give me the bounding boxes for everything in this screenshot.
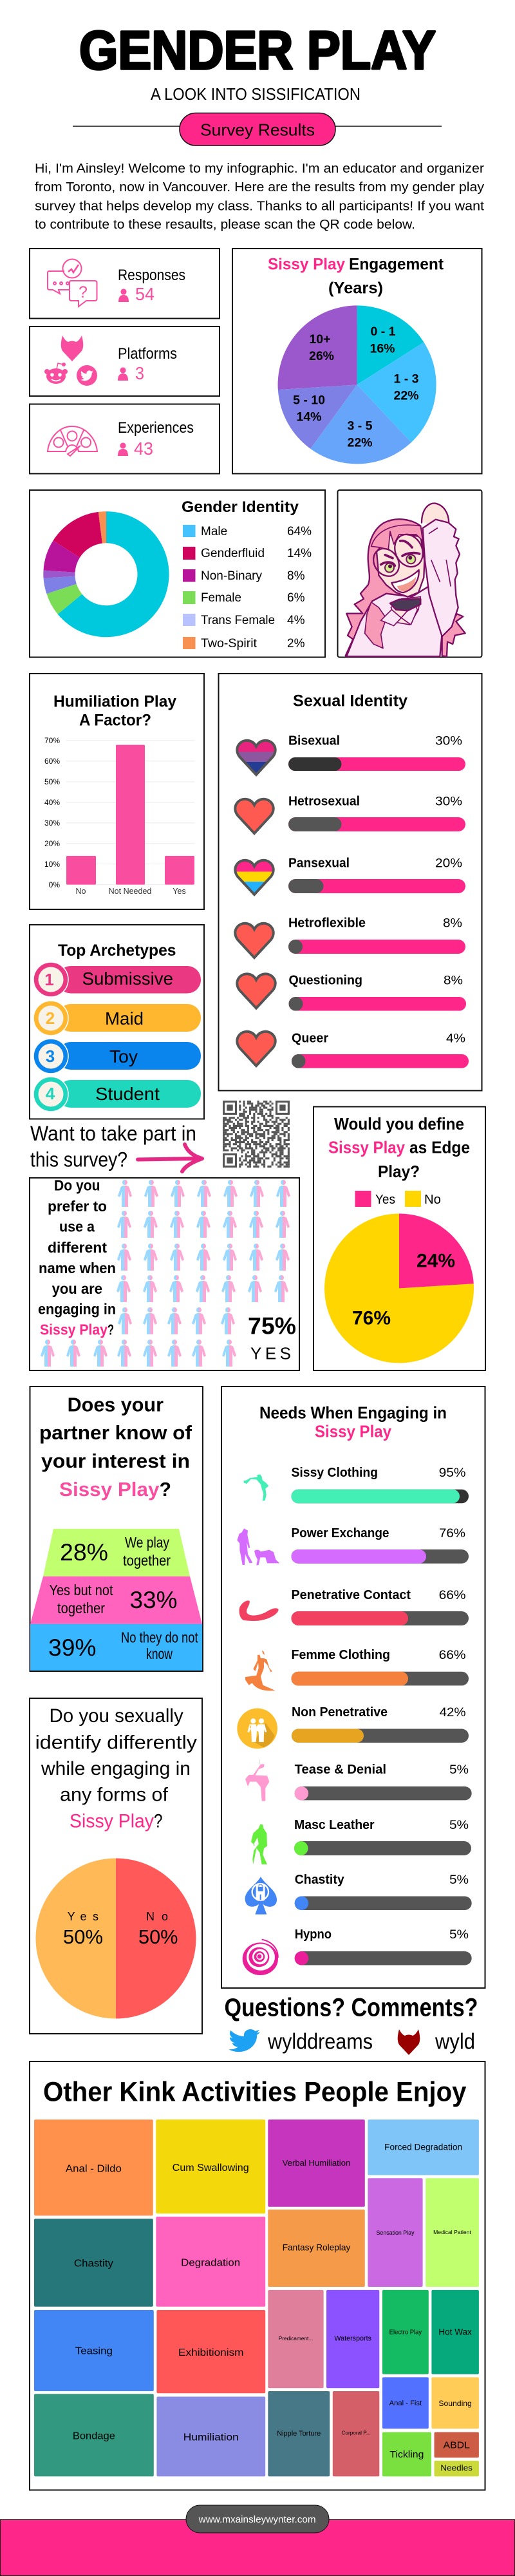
heading: partner know of <box>39 1421 192 1444</box>
legend: Non-Binary <box>201 569 262 583</box>
pictogram: people icons <box>41 1180 290 1367</box>
archetype 2: maid <box>33 1001 201 1036</box>
footer band <box>0 2519 515 2576</box>
treemap: Needles <box>440 2463 473 2472</box>
question text: use a <box>59 1218 95 1235</box>
funnel tier: yes but not together <box>30 1577 202 1624</box>
funnel tier: we play together: 28% <box>60 1539 108 1566</box>
row: power exchange: Power Exchange <box>291 1526 389 1540</box>
funnel tier: we play together: We play <box>125 1534 169 1551</box>
legend: 4% <box>287 614 305 627</box>
heading: Sissy Play <box>70 1811 154 1832</box>
heading <box>328 1114 470 1181</box>
pie chart <box>36 1859 196 2018</box>
pie chart: 16% <box>370 341 395 355</box>
heading <box>259 1403 447 1441</box>
row: pansexual: Pansexual <box>288 857 350 871</box>
panel: gender identity <box>30 490 325 657</box>
row: hetrosexual: 30% <box>435 795 462 809</box>
legend: 14% <box>287 547 312 560</box>
heading: identify differently <box>35 1732 197 1753</box>
treemap: Anal - Fist <box>389 2400 422 2407</box>
row: bisexual: Bisexual <box>288 734 340 748</box>
label: experiences: Experiences <box>118 419 194 437</box>
heading: Sissy Play <box>328 1138 405 1157</box>
heading: ? <box>154 1811 162 1832</box>
pie chart: Yes <box>68 1910 98 1923</box>
heading: A Factor? <box>79 711 151 729</box>
legend: Trans Female <box>201 614 275 627</box>
row: pansexual: 20% <box>435 857 462 871</box>
row: hypno: 5% <box>449 1928 469 1942</box>
title: GENDER PLAY <box>79 20 436 80</box>
heading: Would you define <box>334 1114 464 1133</box>
row: hetroflexible <box>235 916 465 958</box>
call to action text: Want to take part in <box>30 1122 196 1145</box>
treemap: Humiliation <box>183 2432 239 2443</box>
row: penetrative contact: 66% <box>439 1589 466 1602</box>
treemap: Fantasy Roleplay <box>283 2242 350 2253</box>
legend: Male <box>201 525 227 538</box>
treemap: Sensation Play <box>376 2230 415 2236</box>
question text: engaging in <box>38 1301 116 1318</box>
row: queer: 4% <box>446 1032 465 1046</box>
archetype 1: submissive <box>33 962 201 997</box>
pie chart: 22% <box>393 389 419 403</box>
illustration: pink haired character <box>346 503 465 656</box>
bar chart: 50% <box>44 777 60 786</box>
value: 75% yes: 75% <box>248 1313 296 1340</box>
treemap: Watersports <box>334 2335 371 2343</box>
heading: Play? <box>378 1162 420 1181</box>
legend: Two-Spirit <box>201 637 258 650</box>
row: non penetrative <box>237 1705 469 1748</box>
heading <box>53 693 176 729</box>
treemap: Exhibitionism <box>178 2347 244 2358</box>
archetype 3: toy <box>33 1039 201 1074</box>
heading: any forms of <box>60 1784 169 1806</box>
pie chart: 24% <box>417 1251 455 1272</box>
panel: partner knowledge funnel <box>30 1387 203 1671</box>
legend: 2% <box>287 637 305 650</box>
pie chart <box>324 1213 474 1363</box>
pie chart: 22% <box>347 436 373 450</box>
archetype 4: student <box>33 1077 201 1112</box>
row: power exchange: 76% <box>439 1527 465 1540</box>
panel: edge play pie <box>314 1106 485 1370</box>
row: masc leather: Masc Leather <box>294 1818 375 1832</box>
treemap: Corporal P... <box>341 2429 371 2436</box>
intro text: from Toronto, now in Vancouver. Here are the results from my gender play <box>35 180 484 194</box>
treemap: Medical Patient <box>433 2229 471 2235</box>
pie chart: 50% <box>63 1926 103 1948</box>
funnel tier: yes but not together: together <box>57 1600 105 1616</box>
panel: identify differently pie <box>30 1698 202 2034</box>
heading: while engaging in <box>41 1758 191 1779</box>
QR code <box>223 1101 290 1168</box>
row: hetroflexible: 8% <box>443 917 462 931</box>
panel: top archetypes <box>30 925 204 1119</box>
question mark in bubble: ? <box>79 283 88 301</box>
value: 54: 54 <box>135 284 154 304</box>
funnel tier: we play together: together <box>123 1552 171 1569</box>
row: queer: Queer <box>292 1032 328 1046</box>
intro text: to contribute to these resaults, please scan the QR code below. <box>35 218 415 232</box>
pie chart: 3 - 5 <box>347 419 373 433</box>
row: bisexual: 30% <box>435 734 462 748</box>
heading: Gender Identity <box>182 498 299 516</box>
row: masc leather: 5% <box>449 1819 469 1832</box>
icon: twitter <box>77 365 97 386</box>
panel: responses <box>30 249 220 318</box>
pie chart: 76% <box>352 1308 391 1329</box>
bar chart: No <box>76 887 86 896</box>
treemap: Predicament... <box>279 2335 313 2342</box>
value: 75% yes: YES <box>250 1344 291 1363</box>
treemap: Tickling <box>389 2449 424 2460</box>
heading: Needs When Engaging in <box>259 1403 447 1423</box>
icon: mood gauge <box>48 426 97 456</box>
row: hetrosexual <box>235 795 465 833</box>
heading: Other Kink Activities People Enjoy <box>43 2077 467 2108</box>
row: hypno <box>243 1927 472 1975</box>
call to action text: this survey? <box>30 1148 127 1171</box>
panel: sexual identity <box>219 674 482 1091</box>
bar chart: Not Needed <box>109 887 151 896</box>
heading: as Edge <box>409 1138 470 1157</box>
arrow <box>138 1144 202 1171</box>
contact: twitter <box>229 2029 373 2054</box>
pie chart: 14% <box>296 410 322 424</box>
legend: Genderfluid <box>201 547 265 560</box>
question text: you are <box>52 1280 102 1297</box>
treemap: Anal - Dildo <box>66 2164 122 2175</box>
panel: experiences <box>30 404 220 474</box>
row: chastity <box>245 1873 472 1915</box>
question text: different <box>48 1239 107 1256</box>
row: tease and denial <box>245 1759 472 1801</box>
icon: chat bubbles <box>48 259 97 307</box>
pie chart: 0 - 1 <box>370 325 396 339</box>
legend: 8% <box>287 569 305 583</box>
heading: Sissy Play <box>268 255 345 273</box>
row: penetrative contact <box>239 1588 469 1625</box>
heading: your interest in <box>41 1450 190 1472</box>
treemap: Sounding <box>438 2399 472 2408</box>
question text <box>38 1177 116 1338</box>
panel: humiliation play bar chart <box>30 674 204 909</box>
row: queer <box>237 1032 469 1068</box>
icon: person <box>118 289 129 302</box>
intro text: survey that helps develop my class. Thanks to all participants! If you want <box>35 200 484 214</box>
archetype 4: student: Student <box>95 1084 160 1104</box>
row: femme clothing: 66% <box>439 1649 466 1662</box>
treemap: Nipple Torture <box>277 2430 321 2438</box>
archetype 1: submissive: Submissive <box>82 969 173 989</box>
heading <box>35 1705 197 1832</box>
bar chart: 20% <box>44 839 60 848</box>
row: questioning <box>237 974 466 1011</box>
subtitle: A LOOK INTO SISSIFICATION <box>151 84 360 104</box>
legend: Female <box>201 591 241 605</box>
legend: Yes <box>375 1193 395 1207</box>
row: hetroflexible: Hetroflexible <box>288 916 366 931</box>
pie chart: 1 - 3 <box>393 372 419 386</box>
survey results banner: Survey Results <box>200 120 315 139</box>
funnel tier: no they do not know: No they do not <box>121 1629 198 1646</box>
legend <box>355 1191 441 1207</box>
panel: preferred name pictogram <box>30 1177 299 1370</box>
question text: ? <box>108 1321 114 1338</box>
pie chart: 50% <box>138 1926 178 1948</box>
row: penetrative contact: Penetrative Contact <box>291 1588 411 1602</box>
heading: Do you sexually <box>49 1705 183 1727</box>
heading: Does your <box>68 1394 164 1416</box>
archetype 3: toy: 3 <box>46 1046 55 1066</box>
contact: wyld <box>398 2029 475 2055</box>
contact: twitter: wylddreams <box>267 2030 373 2054</box>
question text: Do you <box>54 1177 100 1194</box>
heading <box>268 255 444 298</box>
question text: Sissy Play <box>40 1321 108 1338</box>
archetype 3: toy: Toy <box>109 1046 138 1066</box>
bar chart: Yes <box>173 887 186 896</box>
treemap: Verbal Humiliation <box>283 2158 350 2168</box>
legend: 6% <box>287 591 305 605</box>
treemap: Cum Swallowing <box>173 2163 249 2174</box>
archetype 4: student: 4 <box>46 1084 55 1103</box>
treemap: Forced Degradation <box>384 2141 462 2152</box>
pie chart <box>278 305 436 464</box>
heading <box>39 1394 192 1501</box>
bar chart: 40% <box>44 798 60 807</box>
archetype 2: maid: 2 <box>46 1009 55 1028</box>
panel: platforms <box>30 327 220 396</box>
question text: prefer to <box>48 1198 107 1215</box>
heading: Sexual Identity <box>293 692 407 710</box>
icon: person <box>118 367 128 381</box>
bar chart: 70% <box>44 736 60 745</box>
legend: No <box>424 1193 441 1207</box>
row: sissy clothing: Sissy Clothing <box>291 1466 378 1480</box>
funnel tier: no they do not know: 39% <box>48 1634 97 1661</box>
heading: ? <box>160 1478 171 1501</box>
question text: name when <box>39 1260 116 1276</box>
treemap: ABDL <box>444 2439 470 2451</box>
heading: Sissy Play <box>315 1422 391 1441</box>
pie chart: 10+ <box>309 332 331 346</box>
intro text: Hi, I'm Ainsley! Welcome to my infographic. I'm an educator and organizer <box>35 162 484 176</box>
funnel tier: yes but not together: Yes but not <box>49 1582 113 1598</box>
website pill <box>186 2505 329 2533</box>
funnel tier: no they do not know: know <box>146 1645 173 1662</box>
row: sissy clothing <box>243 1466 469 1503</box>
bar chart <box>44 736 194 896</box>
row: sissy clothing: 95% <box>439 1466 466 1480</box>
treemap <box>34 2119 479 2476</box>
treemap: Chastity <box>74 2258 113 2269</box>
heading: Engagement <box>349 255 444 273</box>
survey results banner <box>73 113 442 146</box>
row: non penetrative: Non Penetrative <box>292 1705 388 1719</box>
heading: Humiliation Play <box>53 693 176 711</box>
row: questioning: 8% <box>444 974 463 988</box>
bar chart: 10% <box>44 860 60 869</box>
call to action text <box>30 1122 196 1171</box>
treemap: Teasing <box>75 2345 113 2356</box>
contact: wyld: wyld <box>435 2030 475 2054</box>
value: 43: 43 <box>134 439 153 459</box>
funnel tier: no they do not know <box>30 1624 202 1671</box>
icon: devil heart <box>61 336 83 361</box>
row: masc leather <box>251 1818 471 1864</box>
row: bisexual <box>234 734 465 776</box>
heading: Sissy Play <box>59 1478 160 1501</box>
legend: 64% <box>287 525 312 538</box>
treemap: Electro Play <box>389 2329 422 2336</box>
funnel tier: yes but not together: 33% <box>130 1587 178 1613</box>
row: hypno: Hypno <box>295 1927 332 1942</box>
row: tease and denial: Tease & Denial <box>295 1763 386 1777</box>
row: power exchange <box>237 1526 469 1566</box>
row: chastity: Chastity <box>295 1873 345 1887</box>
bar chart: 60% <box>44 757 60 766</box>
row: non penetrative: 42% <box>440 1706 466 1719</box>
archetype 2: maid: Maid <box>105 1009 144 1028</box>
row: questioning: Questioning <box>288 974 362 988</box>
panel: portrait of Ainsley <box>337 490 482 657</box>
row: chastity: 5% <box>449 1873 469 1887</box>
questions and comments: Questions? Comments? <box>224 1994 478 2022</box>
bar chart: 0% <box>49 880 60 889</box>
heading: Top Archetypes <box>58 942 176 960</box>
funnel tier: we play together <box>43 1529 190 1577</box>
icon: person <box>118 442 128 456</box>
label: responses: Responses <box>118 267 185 284</box>
row: pansexual <box>232 857 465 896</box>
icon: reddit <box>44 363 68 384</box>
intro text <box>35 162 484 232</box>
panel: engagement pie <box>232 249 482 474</box>
archetype 1: submissive: 1 <box>44 970 54 989</box>
pie chart: 5 - 10 <box>293 393 325 408</box>
row: femme clothing <box>245 1648 469 1690</box>
pie chart: 26% <box>309 349 334 363</box>
panel: other kink activities treemap <box>30 2061 485 2490</box>
label: platforms: Platforms <box>118 345 177 363</box>
treemap: Bondage <box>73 2431 115 2442</box>
treemap: Degradation <box>181 2257 240 2268</box>
value: 3: 3 <box>135 363 144 383</box>
website pill: www.mxainsleywynter.com <box>198 2514 316 2525</box>
pie chart: No <box>146 1910 168 1923</box>
row: tease and denial: 5% <box>449 1763 469 1777</box>
row: hetrosexual: Hetrosexual <box>288 795 360 809</box>
donut chart <box>43 511 169 637</box>
bar chart: 30% <box>44 819 60 828</box>
row: femme clothing: Femme Clothing <box>291 1648 390 1662</box>
value: 75% yes <box>248 1313 296 1363</box>
treemap: Hot Wax <box>438 2327 472 2337</box>
legend <box>183 525 312 650</box>
panel: needs when engaging <box>221 1387 485 1988</box>
heading: (Years) <box>328 279 383 298</box>
